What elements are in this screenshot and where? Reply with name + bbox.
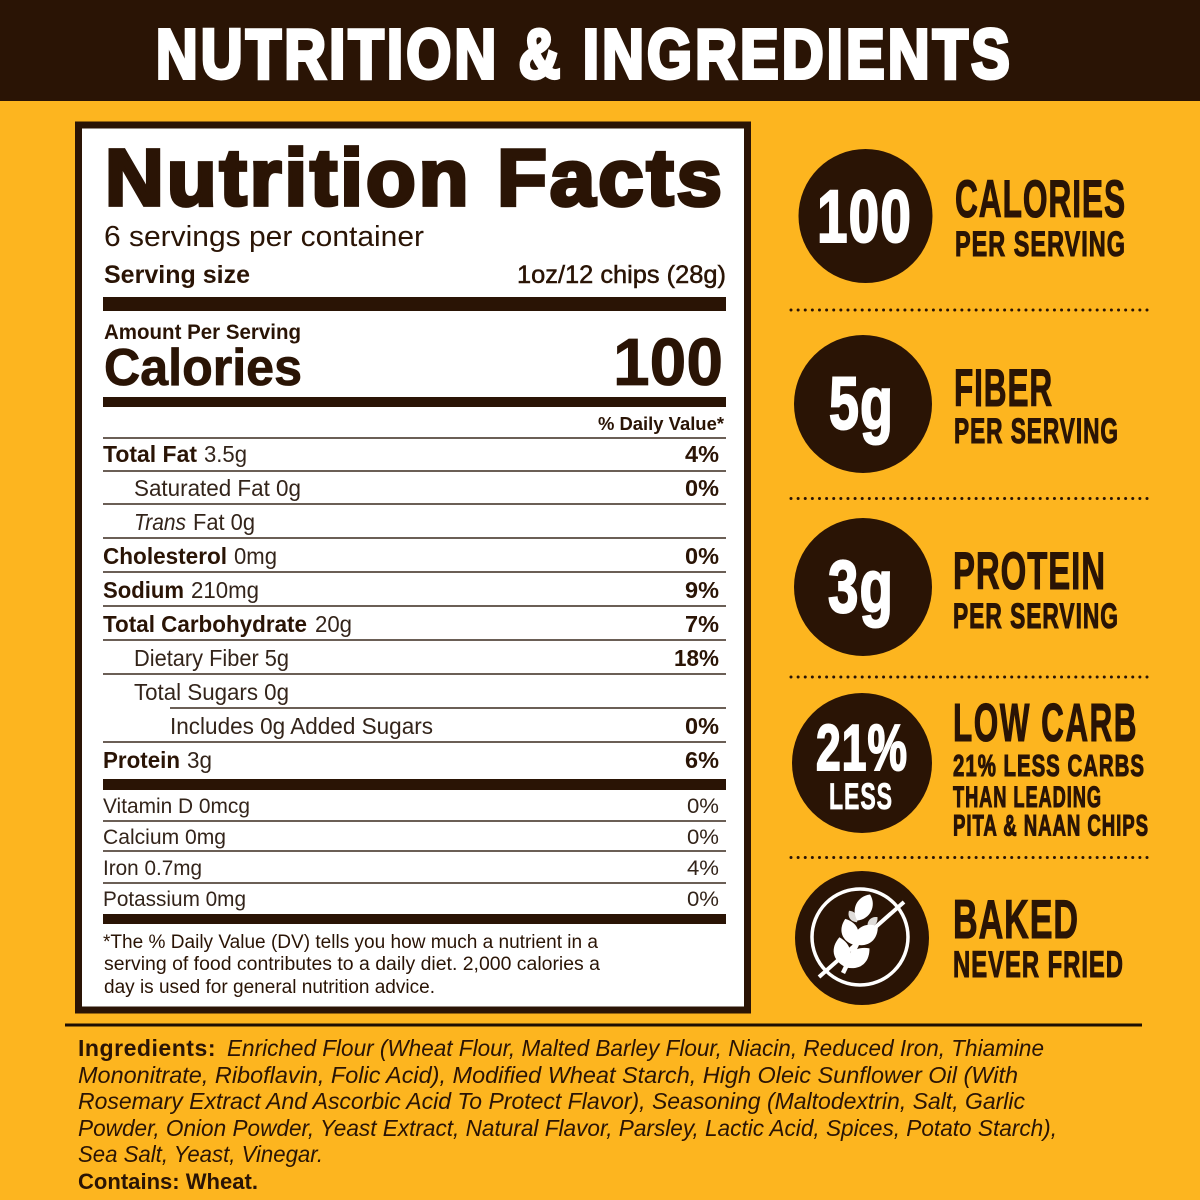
panel: nutrition facts label [78, 125, 748, 1010]
row: dietary fiber: Dietary Fiber 5g [134, 645, 289, 671]
ingredients text block: Mononitrate, Riboflavin, Folic Acid), Modified Wheat Starch, High Oleic Sunflower Oil (With [78, 1062, 1018, 1088]
row: vitamin d: Vitamin D 0mcg [103, 795, 250, 818]
row: protein: 6% [685, 747, 719, 773]
serving size row: 1oz/12 chips (28g) [517, 261, 726, 289]
ingredients text block: Enriched Flour (Wheat Flour, Malted Barley Flour, Niacin, Reduced Iron, Thiamine [227, 1035, 1044, 1061]
row: dietary fiber [134, 645, 719, 671]
row: total fat: 4% [685, 441, 719, 467]
icon: crossed-out wheat [795, 871, 929, 1005]
callout: 3g protein [794, 518, 1119, 656]
ingredients text block: Ingredients: [78, 1035, 216, 1061]
badge: 100: 100 [817, 175, 912, 258]
row: total carbohydrate: Total Carbohydrate [103, 611, 307, 637]
footnote [103, 932, 600, 998]
allergen statement: Contains: Wheat. [78, 1169, 258, 1194]
row: trans fat: Fat 0g [193, 509, 255, 535]
ingredients text block: Powder, Onion Powder, Yeast Extract, Natural Flavor, Parsley, Lactic Acid, Spices, Potato Starch), [78, 1115, 1057, 1141]
row: total carbohydrate [103, 611, 719, 637]
calories row [104, 325, 723, 400]
serving size row [104, 261, 726, 289]
row: total sugars: Total Sugars 0g [134, 679, 289, 705]
badge: 3g [794, 518, 932, 656]
row: iron: 4% [687, 857, 719, 880]
row: cholesterol: 0mg [234, 543, 277, 569]
heading: Nutrition Facts: Nutrition Facts [105, 133, 725, 222]
row: sodium [103, 577, 719, 603]
row: sodium: Sodium [103, 577, 184, 603]
badge: 5g [794, 335, 932, 473]
row: total carbohydrate: 20g [315, 611, 352, 637]
badge: 21% less: 21% [816, 711, 908, 784]
callout: 5g fiber: FIBER [954, 359, 1053, 418]
ingredients text block: Sea Salt, Yeast, Vinegar. [78, 1141, 323, 1167]
ingredients text block [78, 1035, 1057, 1194]
row: total carbohydrate: 7% [685, 611, 719, 637]
row: iron: Iron 0.7mg [103, 857, 202, 880]
callout: baked never fried [795, 871, 1124, 1005]
serving size row: Serving size [104, 261, 250, 289]
callout: 5g fiber [794, 335, 1119, 473]
row: added sugars [170, 713, 719, 739]
servings per container: 6 servings per container [104, 221, 424, 253]
daily value header: % Daily Value* [598, 414, 724, 434]
footnote: *The % Daily Value (DV) tells you how much a nutrient in a [103, 932, 598, 953]
row: potassium [103, 888, 719, 911]
badge: 21% less: LESS [829, 776, 893, 817]
callout: baked never fried: BAKED [953, 888, 1079, 950]
row: trans fat [134, 509, 255, 535]
row: calcium: Calcium 0mg [103, 826, 226, 849]
row: total fat: Total Fat [103, 441, 197, 467]
row: saturated fat: Saturated Fat 0g [134, 475, 301, 501]
row: protein [103, 747, 719, 773]
row: sodium: 210mg [191, 577, 259, 603]
calories row: 100 [613, 325, 723, 400]
badge: 21% less [792, 693, 932, 833]
row: calcium: 0% [687, 826, 719, 849]
calories row: Calories [104, 339, 302, 397]
badge: 3g: 3g [828, 545, 894, 628]
row: sodium: 9% [685, 577, 719, 603]
row: calcium [103, 826, 719, 849]
row: added sugars: Includes 0g Added Sugars [170, 713, 433, 739]
row: vitamin d [103, 795, 719, 818]
ingredients text block: Rosemary Extract And Ascorbic Acid To Protect Flavor), Seasoning (Maltodextrin, Salt, Garlic [78, 1088, 1025, 1114]
row: iron [103, 857, 719, 880]
row: trans fat: Trans [134, 509, 186, 535]
title: NUTRITION & INGREDIENTS [156, 15, 1013, 93]
row: cholesterol: Cholesterol [103, 543, 227, 569]
row: saturated fat [134, 475, 719, 501]
callout: low carb [792, 693, 1149, 842]
row: cholesterol [103, 543, 719, 569]
row: cholesterol: 0% [685, 543, 719, 569]
row: total fat [103, 441, 719, 467]
badge: 5g: 5g [829, 362, 894, 445]
badge: 100 [798, 149, 932, 283]
row: potassium: 0% [687, 888, 719, 911]
row: dietary fiber: 18% [674, 645, 719, 671]
row: protein: Protein [103, 747, 180, 773]
callout: 3g protein: PROTEIN [953, 542, 1106, 601]
footnote: day is used for general nutrition advice. [104, 977, 435, 998]
row: total fat: 3.5g [204, 441, 247, 467]
row: added sugars: 0% [685, 713, 719, 739]
row: potassium: Potassium 0mg [103, 888, 246, 911]
callout: 100 calories [798, 149, 1126, 283]
callout: low carb: THAN LEADING [953, 781, 1102, 814]
amount per serving: Amount Per Serving [104, 321, 301, 344]
footnote: serving of food contributes to a daily diet. 2,000 calories a [104, 954, 600, 975]
row: saturated fat: 0% [685, 475, 719, 501]
row: protein: 3g [187, 747, 212, 773]
row: vitamin d: 0% [687, 795, 719, 818]
header band [0, 0, 1200, 101]
